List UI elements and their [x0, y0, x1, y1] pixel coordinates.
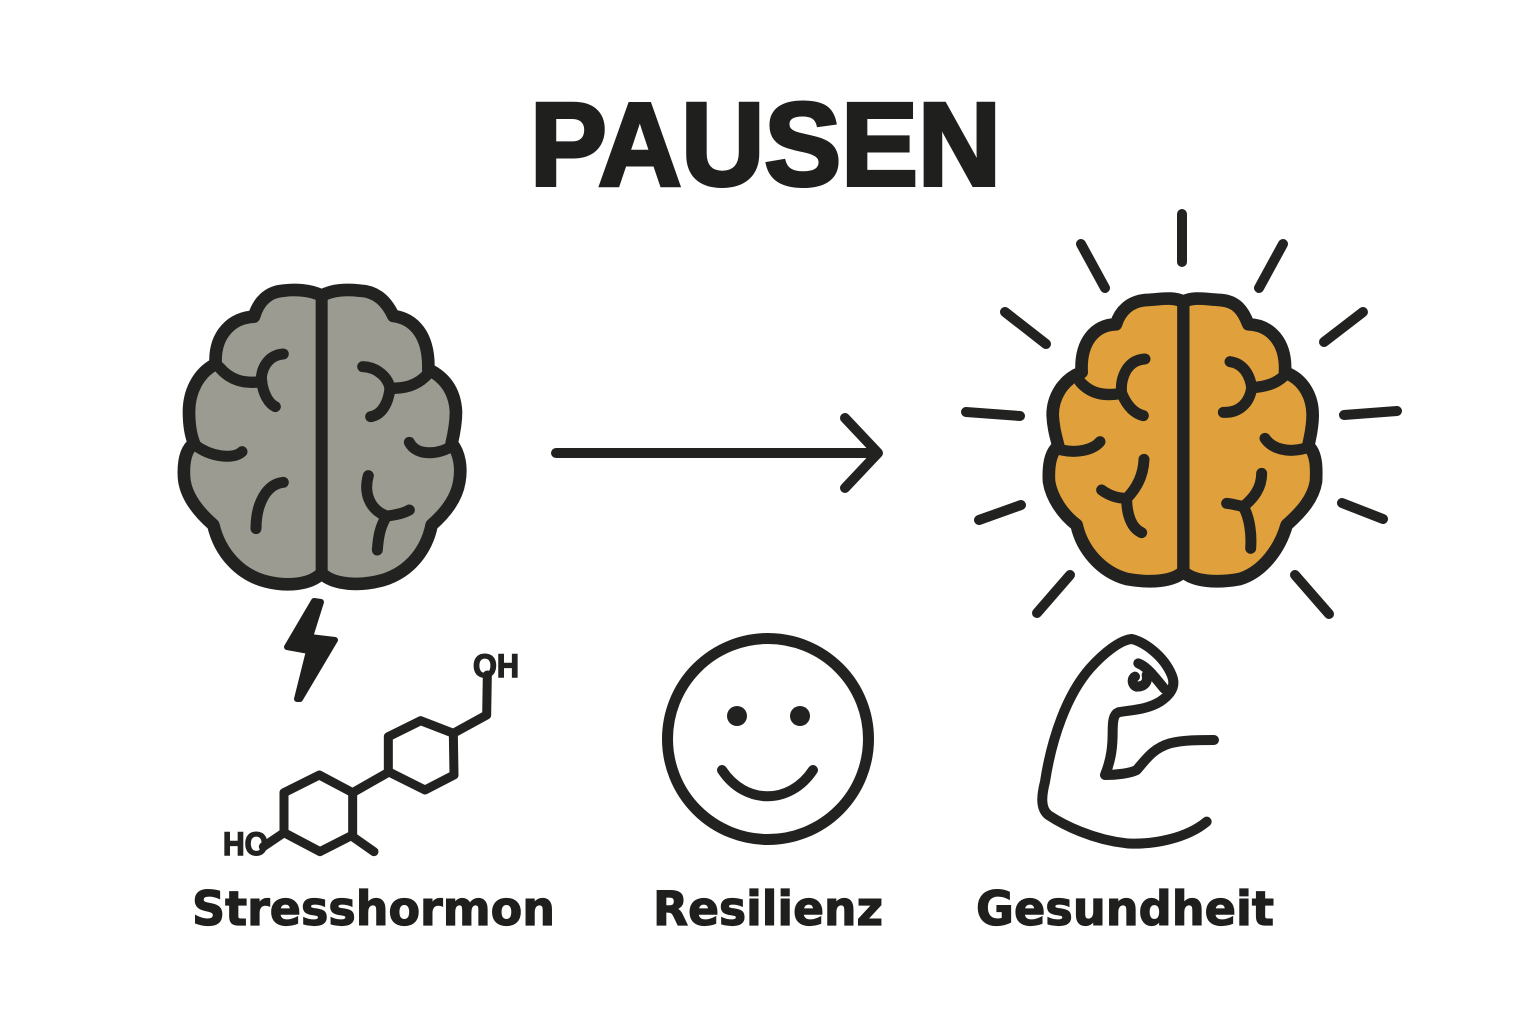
icon: stressed grey brain [184, 290, 460, 584]
arrow: from stressed to healthy brain [556, 418, 878, 488]
icon: radiating rays [966, 214, 1397, 614]
label: Stresshormon: Stresshormon [192, 882, 555, 937]
molecule label: OH: OH [473, 648, 519, 684]
icon: smiley [668, 638, 868, 840]
icon: stress hormone molecule [263, 675, 487, 852]
molecule label: HO: HO [223, 826, 268, 862]
label: Gesundheit: Gesundheit [976, 882, 1274, 937]
icon: lightning bolt [287, 601, 335, 699]
icon: healthy orange brain [1049, 299, 1316, 581]
title: PAUSEN [530, 79, 1001, 211]
icon: flexed muscle arm [1042, 639, 1214, 844]
label: Resilienz: Resilienz [653, 882, 883, 937]
